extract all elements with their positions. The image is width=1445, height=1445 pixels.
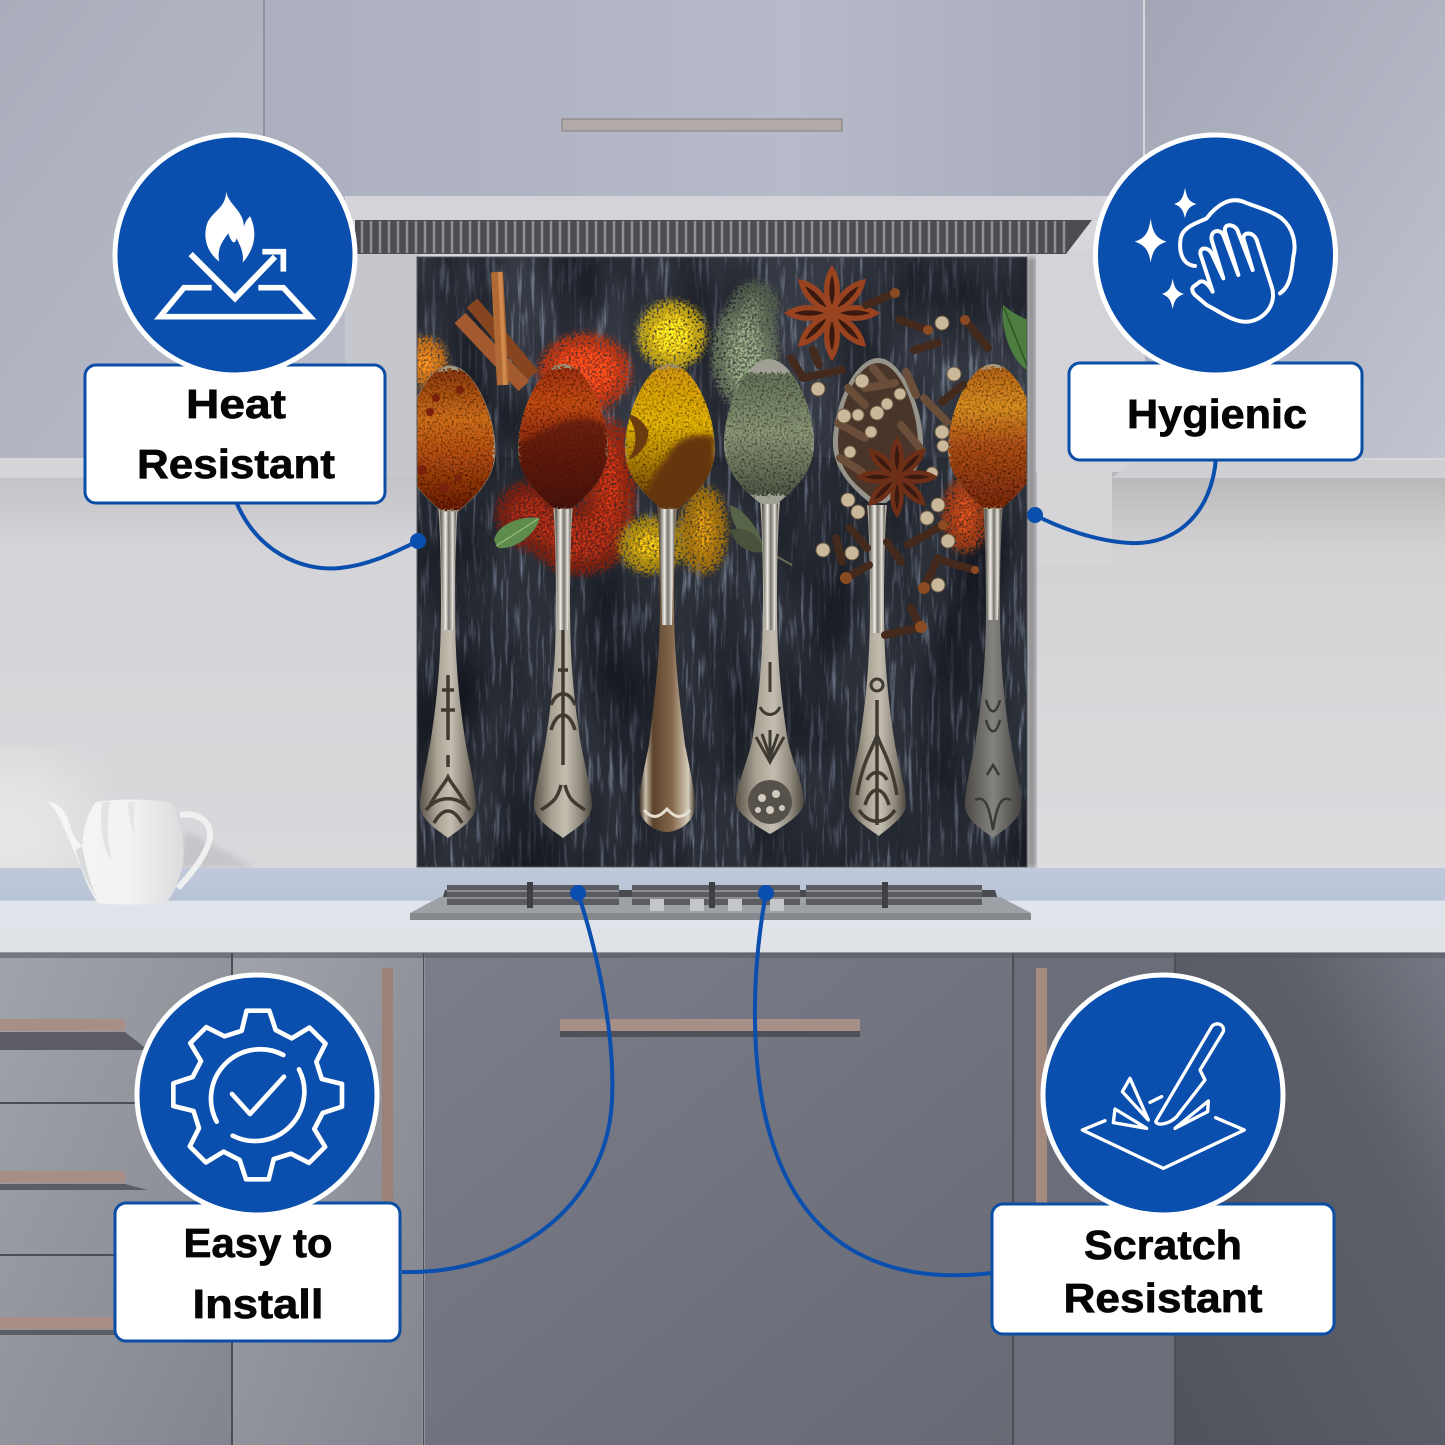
handle (420, 505, 476, 838)
hood vent (355, 220, 1092, 254)
hood body (347, 196, 1102, 220)
lower cabinet door: left tall (233, 953, 422, 1445)
bowl (418, 366, 496, 512)
heading: Easy to (184, 1220, 332, 1266)
peppercorns (811, 316, 961, 592)
drawer seams (0, 953, 1175, 1445)
spoon 3 (625, 364, 715, 832)
heading: Hygienic (1127, 391, 1307, 437)
icon: hand wiping with sparkles (1135, 187, 1295, 322)
yellow powder top (642, 305, 702, 365)
spoon 6 (948, 364, 1026, 838)
right wall under hood (1036, 250, 1145, 472)
spoon 2 (518, 364, 608, 838)
connector: scratch resistant (755, 887, 992, 1275)
drawer handles (0, 1019, 148, 1335)
splashback panel: spices and spoons (405, 257, 1038, 867)
cinnamon sticks (460, 272, 533, 386)
left orange powder (407, 340, 443, 384)
grunge streaks (417, 257, 1027, 867)
wall right (1027, 470, 1445, 870)
orange powder right lower (947, 480, 983, 550)
badge circle (137, 975, 377, 1215)
connector: hygienic (1029, 458, 1216, 543)
herb leaves (730, 505, 792, 565)
left cabinet underside (0, 458, 200, 478)
label box (115, 1203, 400, 1341)
spoon 1 (418, 366, 496, 838)
upper centre cabinet (265, 0, 1143, 196)
badge circle (115, 135, 355, 375)
heading: Scratch (1084, 1222, 1242, 1268)
countertop (0, 868, 1445, 953)
leaf small left (494, 517, 540, 548)
counter underside shadow (0, 952, 1445, 958)
wall under hood (345, 250, 420, 475)
lower cabinet door: centre (425, 953, 1012, 1445)
teapot shadow on wall (180, 830, 255, 868)
lower cabinet door: right (1176, 953, 1445, 1445)
yellow powder lower (622, 488, 722, 572)
upper left cabinet (0, 0, 345, 458)
feature: easy to install (115, 975, 400, 1341)
star anise top (784, 265, 880, 361)
right cabinet underside (1112, 460, 1445, 478)
lower cabinet door: far left drawers (0, 953, 231, 1445)
upper right cabinet (1145, 0, 1445, 458)
clove copper tips (840, 288, 979, 633)
heading: Resistant (137, 441, 335, 487)
vertical handle left (382, 968, 393, 1278)
lower cabinet door: right narrow (1014, 953, 1174, 1445)
slate background (417, 257, 1027, 867)
icon: knife scratching surface (1082, 1024, 1244, 1168)
connector: heat resistant (235, 499, 424, 568)
wall left (0, 470, 420, 870)
feature: heat resistant (85, 135, 385, 503)
wall lower-left glow (0, 760, 90, 900)
icon: flame over surface with arrow (160, 191, 310, 317)
label box (85, 365, 385, 503)
label box (1069, 363, 1362, 460)
label box (992, 1204, 1334, 1334)
teapot (48, 799, 210, 904)
badge circle (1043, 975, 1283, 1215)
hob (410, 882, 1031, 920)
red powder back (500, 338, 630, 570)
heading: Install (192, 1281, 324, 1327)
star anise in spoon (856, 436, 938, 518)
wall beside shelf without shadow (1027, 470, 1112, 565)
top lighter wash (417, 257, 1027, 457)
dark blotches (417, 257, 1027, 867)
feature: scratch resistant (992, 975, 1334, 1334)
spoon 4 (724, 359, 814, 834)
heading: Heat (186, 381, 286, 427)
top handle (562, 119, 842, 131)
icon: gear with check (161, 999, 354, 1191)
panel soft edge (417, 257, 1027, 867)
feature: hygienic (1069, 135, 1362, 460)
vertical handle right (1036, 968, 1047, 1203)
heading: Resistant (1064, 1275, 1263, 1321)
badge circle (1096, 135, 1336, 375)
cloves (791, 293, 988, 635)
green herb pile (717, 285, 775, 405)
centre drawer handle (560, 1019, 860, 1037)
connector: easy to install (402, 887, 612, 1272)
cabinet seam (263, 0, 265, 196)
panel shadow on right wall (1027, 257, 1036, 868)
right leaf (1002, 305, 1026, 370)
spoon 5 (833, 358, 923, 836)
